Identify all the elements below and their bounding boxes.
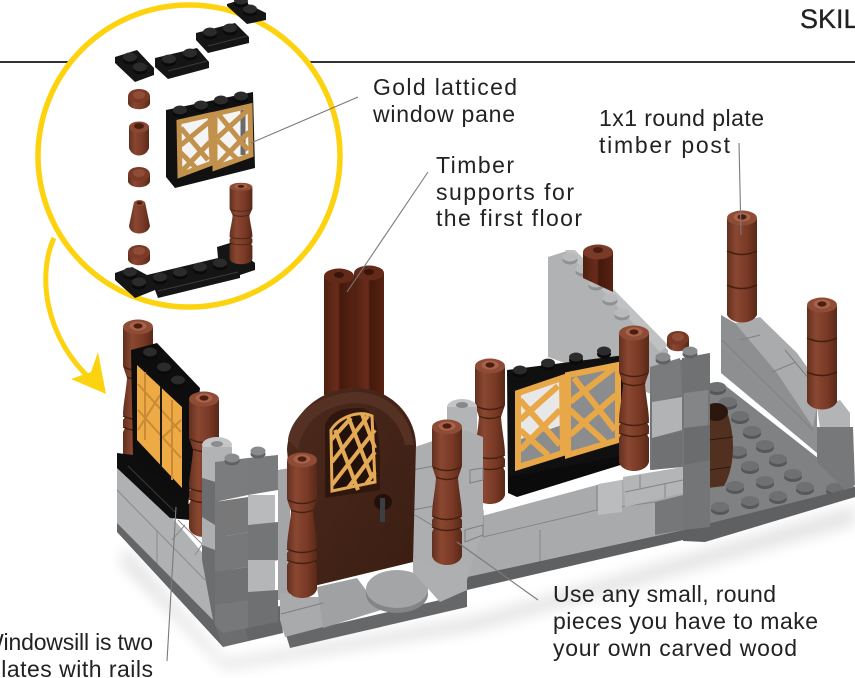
lower strip by door (283, 590, 467, 648)
round plate two (128, 167, 150, 187)
post right of door (432, 420, 462, 565)
barrel (704, 403, 733, 488)
timber supports for first floor (324, 266, 384, 395)
door threshold plate (280, 578, 381, 637)
post front of door left (287, 452, 317, 598)
arched door (287, 388, 416, 590)
label: carved wood tip: your own carved wood (553, 635, 797, 661)
label: timber supports (436, 152, 582, 231)
label: carved wood tip: pieces you have to make (553, 608, 818, 634)
left back post (123, 320, 153, 465)
stone wall section (467, 467, 683, 577)
right window (507, 346, 627, 497)
label: gold latticed window pane (372, 74, 517, 127)
black window frame (166, 92, 255, 188)
round stone plate (366, 570, 428, 613)
label: gold latticed window pane: Gold latticed (373, 74, 517, 100)
model (117, 210, 855, 648)
post beside left window (189, 392, 219, 537)
back light wall (548, 250, 668, 400)
bottom rail plate (115, 243, 255, 298)
rail plate middle (155, 48, 209, 79)
exploded view circle (38, 5, 340, 307)
label: windowsill (0, 629, 153, 678)
left wall base (117, 460, 283, 647)
label: timber supports: the first floor (436, 205, 582, 231)
left stone column (202, 437, 290, 647)
label: gold latticed window pane: window pane (372, 101, 515, 127)
cone (129, 200, 150, 234)
stud floor (683, 382, 855, 542)
post left of right window (475, 358, 505, 504)
back round posts (583, 244, 689, 351)
model shadow (120, 505, 855, 670)
label: carved wood tip: Use any small, round (553, 581, 776, 607)
exploded parts (115, 0, 266, 298)
leader lines (167, 97, 741, 661)
left black window (117, 343, 200, 520)
plate overlapping circle (227, 0, 266, 24)
timber posts right (727, 210, 757, 322)
corner end piece (817, 400, 855, 490)
header rule (0, 61, 855, 63)
round plate three (128, 245, 150, 265)
label: timber supports: Timber (436, 152, 514, 178)
post right of right window (619, 326, 649, 471)
label: 1x1 round plate timber post (599, 105, 764, 158)
label: 1x1 round plate timber post: timber post (599, 132, 731, 158)
label: carved wood tip (553, 581, 818, 661)
rail plate upper (196, 23, 249, 53)
right stone column (650, 346, 710, 530)
round brick (129, 122, 149, 156)
plate with two studs (115, 50, 154, 82)
right back wall (721, 315, 817, 453)
stone step (413, 557, 467, 602)
turned post (230, 183, 252, 264)
yellow connector arrow (46, 238, 106, 394)
lower plate strip (467, 530, 683, 590)
round plate one (128, 89, 150, 109)
label: timber supports: supports for (436, 179, 574, 205)
label: 1x1 round plate timber post: 1x1 round plate (599, 105, 764, 131)
far right timber post (807, 298, 837, 410)
door side stone wall (412, 399, 483, 602)
